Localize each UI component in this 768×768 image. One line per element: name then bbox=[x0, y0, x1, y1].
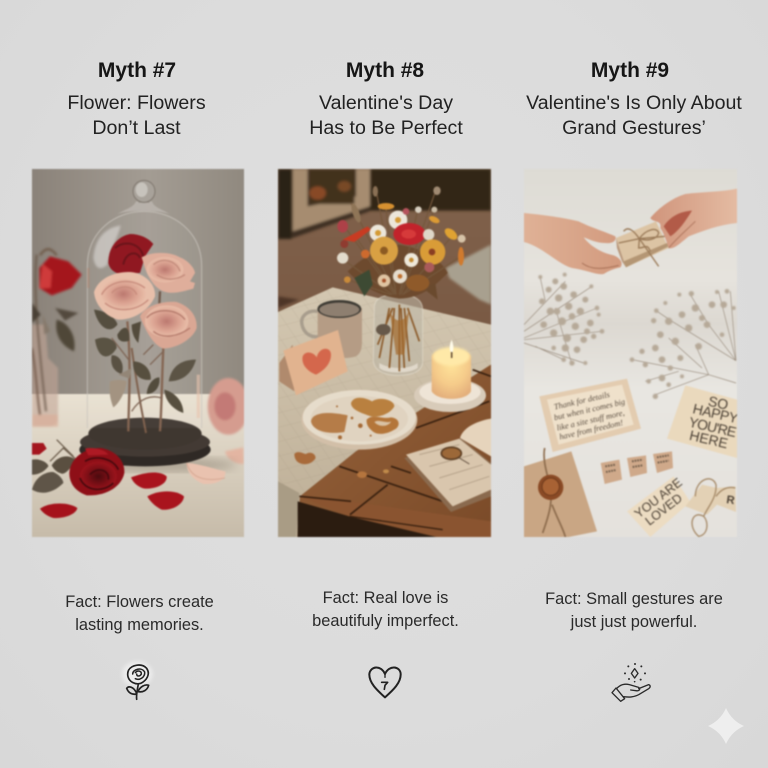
tablecloth bbox=[278, 287, 491, 537]
icon: hand with sparkles bbox=[611, 663, 651, 702]
fact text: myth 8: Fact: Real love is bbox=[323, 589, 448, 607]
left hand bbox=[524, 213, 622, 274]
YOU ARE LOVED card bbox=[627, 475, 690, 537]
candle on saucer bbox=[414, 340, 486, 412]
subheading: myth 8 statement bbox=[309, 92, 463, 139]
panel: candle and bouquet table photo bbox=[277, 168, 492, 538]
card text: YOU ARE bbox=[632, 475, 685, 521]
rose petals bbox=[40, 463, 225, 518]
handwritten note card: have from freedom! bbox=[558, 418, 624, 442]
subheading: myth 7 statement: Don’t Last bbox=[92, 117, 181, 139]
fact text: myth 7: Fact: Flowers create bbox=[65, 593, 214, 611]
fact text: myth 7 bbox=[65, 593, 214, 634]
right hand bbox=[650, 189, 737, 248]
SO HAPPY card: HERE bbox=[688, 427, 730, 451]
card text: SO bbox=[707, 393, 730, 413]
handwritten note card: like a site stuff more, bbox=[556, 408, 625, 433]
coffee mug bbox=[302, 300, 362, 358]
panel: glass dome roses photo bbox=[31, 168, 245, 538]
subheading: myth 9 statement: Grand Gestures’ bbox=[562, 117, 706, 139]
fallen leaves bbox=[32, 440, 80, 493]
twine tags bbox=[685, 479, 736, 536]
bouquet stems and mason jar bbox=[373, 294, 423, 375]
crumb cookies bbox=[294, 452, 389, 478]
SO HAPPY card bbox=[667, 385, 740, 458]
right blurred pink rose bbox=[208, 378, 249, 464]
gypsophila left sprig bbox=[524, 273, 604, 366]
subheading: myth 7 statement bbox=[67, 92, 206, 139]
wildflower bouquet bbox=[337, 186, 466, 300]
fact text: myth 9: just just powerful. bbox=[571, 613, 697, 631]
glass dome bbox=[87, 180, 202, 428]
left vase and blurred rose bbox=[32, 249, 82, 427]
red rose in dome bbox=[108, 234, 153, 273]
subheading: myth 9 statement bbox=[526, 92, 742, 139]
pink rose top right bbox=[142, 253, 195, 293]
dome base bbox=[79, 418, 211, 466]
YOU ARE LOVED card: LOVED bbox=[643, 491, 685, 528]
pink rose center left bbox=[94, 272, 155, 320]
open book bbox=[404, 419, 491, 512]
subheading: myth 8 statement: Has to Be Perfect bbox=[309, 117, 463, 139]
subheading: myth 8 statement: Valentine's Day bbox=[319, 92, 453, 114]
table shadows bbox=[90, 457, 237, 472]
icon: heart with chip bbox=[368, 666, 402, 698]
fallen red rose bbox=[69, 448, 124, 495]
icon: rose bbox=[122, 662, 152, 700]
fact text: myth 9: Fact: Small gestures are bbox=[545, 590, 723, 608]
subheading: myth 7 statement: Flower: Flowers bbox=[67, 92, 206, 114]
background window bbox=[278, 169, 491, 308]
fact text: myth 8 bbox=[312, 589, 459, 630]
panel: small gestures flat-lay photo bbox=[523, 170, 738, 538]
stems and leaves bbox=[94, 291, 196, 433]
heading: Myth #9: Myth #9 bbox=[591, 59, 669, 82]
kraft envelope with wax seal bbox=[524, 448, 597, 537]
heading: Myth #8: Myth #8 bbox=[346, 59, 424, 82]
gift box bbox=[616, 221, 669, 267]
fact text: myth 8: beautifuly imperfect. bbox=[312, 612, 459, 630]
handwritten note card bbox=[539, 379, 641, 452]
pink rose lower right bbox=[140, 302, 197, 349]
wooden letter cubes bbox=[601, 451, 673, 484]
fact text: myth 7: lasting memories. bbox=[75, 616, 204, 634]
wood table bbox=[298, 365, 491, 537]
heart card bbox=[279, 330, 348, 395]
icon: four-point sparkle watermark bbox=[708, 708, 744, 744]
subheading: myth 9 statement: Valentine's Is Only About bbox=[526, 92, 742, 114]
note text: Thank for details bbox=[553, 390, 611, 412]
fact text: myth 9 bbox=[545, 590, 723, 631]
handwritten note card: but when it comes big bbox=[553, 397, 626, 422]
tag letter: R bbox=[726, 494, 735, 507]
dome highlight bbox=[93, 225, 121, 268]
cookie plate bbox=[301, 390, 417, 450]
heading: Myth #7: Myth #7 bbox=[98, 59, 176, 82]
gypsophila right sprig bbox=[630, 289, 736, 399]
SO HAPPY card: YOU'RE bbox=[687, 414, 737, 440]
